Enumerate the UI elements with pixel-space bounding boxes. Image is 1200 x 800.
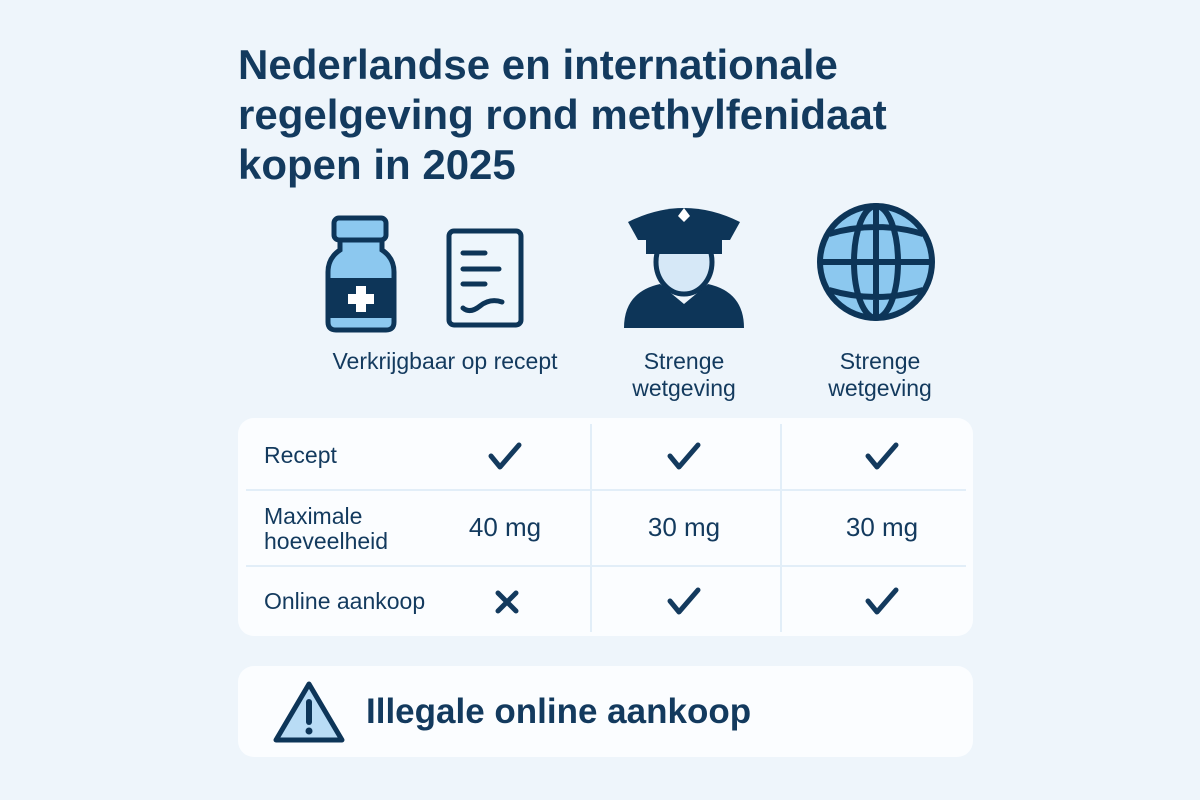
label: verkrijgbaar: Verkrijgbaar op recept xyxy=(332,348,558,374)
label: strenge wetgeving 1: Strenge xyxy=(644,348,724,374)
title: regelgeving rond methylfenidaat xyxy=(238,91,887,138)
icon: globe xyxy=(817,203,935,321)
label: strenge wetgeving 1: wetgeving xyxy=(632,375,736,401)
title: kopen in 2025 xyxy=(238,141,516,188)
title xyxy=(238,41,887,188)
panel: comparison table: 30 mg xyxy=(846,512,918,542)
label: strenge wetgeving 2: Strenge xyxy=(840,348,920,374)
row label: maximale hoeveelheid: hoeveelheid xyxy=(264,528,388,554)
values row 2: 40 mg xyxy=(469,512,541,542)
label: strenge wetgeving 2: wetgeving xyxy=(828,375,932,401)
row 3 marks xyxy=(496,588,898,614)
title: Nederlandse en internationale xyxy=(238,41,838,88)
panel: warning xyxy=(238,666,973,757)
row label: maximale hoeveelheid xyxy=(264,503,388,554)
row label: recept: Recept xyxy=(264,442,337,468)
icon: police officer xyxy=(624,208,744,328)
icon: prescription document xyxy=(446,228,524,328)
icon: medicine bottle xyxy=(326,216,396,332)
panel: comparison table xyxy=(238,418,973,636)
warning text: Illegale online aankoop xyxy=(366,692,751,731)
label: strenge wetgeving 1 xyxy=(632,348,736,401)
row label: maximale hoeveelheid: Maximale xyxy=(264,503,362,529)
panel: comparison table: 30 mg xyxy=(648,512,720,542)
icon: warning triangle xyxy=(274,682,344,742)
row label: online aankoop: Online aankoop xyxy=(264,588,425,614)
checks row 1 xyxy=(488,442,898,470)
label: strenge wetgeving 2 xyxy=(828,348,932,401)
